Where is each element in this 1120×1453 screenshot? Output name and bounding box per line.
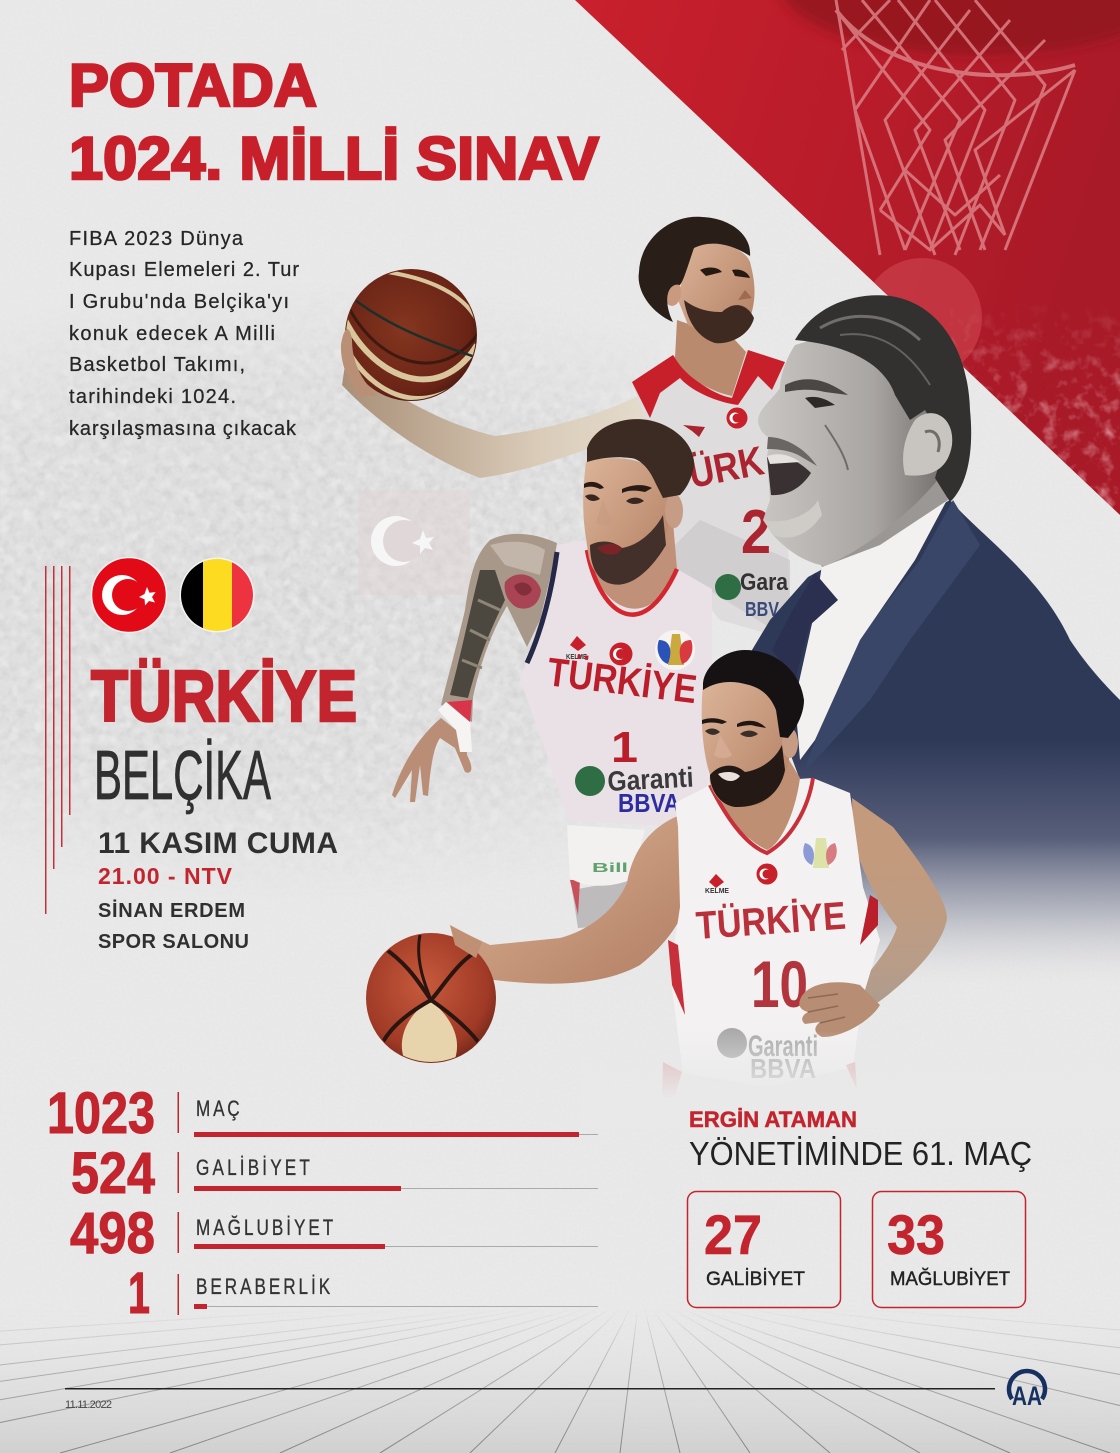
photo: front player dribbling: TÜRKİYE [695,895,847,948]
icon: hoop net [836,0,1075,255]
match details: 21.00 - NTV [98,863,233,889]
background: basketball court floor [0,1316,1120,1453]
coach hair [795,295,971,502]
hand with tape [392,718,471,802]
intro text block: FIBA 2023 Dünya [69,228,244,250]
stat: wins [71,1141,598,1206]
stat: draws [128,1261,598,1326]
match details: SİNAN ERDEM [98,899,245,922]
intro text block: tarihindeki 1024. [69,386,236,408]
intro text block: I Grubu'nda Belçika'yı [69,291,289,313]
left arm [450,815,690,984]
coach ear [903,413,952,476]
title: 1024. MİLLİ SINAV [69,125,599,192]
coach heading: ERGİN ATAMAN [689,1107,857,1132]
card: coach wins: 27 [704,1203,762,1266]
photo: back player with raised ball [342,217,790,640]
eyes [702,718,766,728]
hair [587,419,694,498]
photo: coach Ergin Ataman [752,295,1120,985]
background: faded crowd [0,336,640,850]
coach suit [752,500,1120,985]
photo: middle player: TÜRKİYE [545,649,699,712]
photo: front player dribbling: 10 [751,947,808,1021]
stat: wins: GALİBİYET [196,1155,310,1181]
card: coach losses: MAĞLUBİYET [890,1268,1010,1290]
photo: back player with raised ball: Gara [740,569,789,596]
shorts and leg [572,880,628,928]
hand on jersey [799,982,880,1037]
coach face [758,320,950,566]
match details [98,827,338,953]
date: 11.11.2022 [65,1399,112,1411]
icon: AA logo [1009,1371,1045,1411]
jersey [670,778,880,1087]
coach eye and brow [785,379,848,395]
match teams [91,657,357,814]
card: coach losses [872,1192,1026,1308]
face [702,682,790,808]
photo fade at the bottom [580,1030,1120,1128]
coach shirt [795,500,947,760]
photo: middle player: BBVA [618,788,680,818]
card: coach losses: 33 [887,1203,945,1266]
stat: losses: MAĞLUBİYET [196,1215,333,1241]
photo: middle player [392,419,712,928]
hair [703,650,804,738]
icon: Turkish flag [92,558,166,632]
intro text block [69,228,299,440]
intro text block: Basketbol Takımı, [69,354,245,376]
match details: 11 KASIM CUMA [98,827,338,860]
beard [590,515,666,585]
face [583,458,669,585]
side trim [668,940,685,1015]
stat: matches [47,1081,598,1146]
photo: middle player: 1 [611,723,638,772]
jersey [520,540,712,826]
icon: AA logo: AA [1012,1381,1042,1411]
stat: losses: 498 [70,1201,155,1266]
intro text block: konuk edecek A Milli [69,323,275,345]
coach neck [800,440,948,567]
match teams: BELÇİKA [94,736,271,814]
match teams: TÜRKİYE [91,657,357,737]
neck [712,745,800,850]
stat: wins: 524 [71,1141,155,1206]
card: coach wins [688,1192,840,1308]
beard [710,745,785,807]
icon: dribbled basketball [366,925,496,1070]
stat: draws: 1 [128,1261,150,1326]
title [69,52,599,192]
photo: front player dribbling: Garanti [748,1030,818,1063]
card: coach wins: GALİBİYET [706,1269,805,1290]
jersey marks [709,874,724,888]
tattooed arm [441,534,557,722]
photo: back player with raised ball: BBV [745,599,780,621]
photo: middle player: Bill [592,860,628,875]
stats: all-time record bars [47,1081,598,1326]
coach heading: YÖNETİMİNDE 61. MAÇ [689,1135,1032,1172]
coach tie [772,573,838,680]
stat: losses [70,1201,598,1266]
decorative match stripes [45,566,70,914]
coach mouth [767,456,811,495]
photo: middle player: Garanti [607,762,694,797]
icon: raised basketball [341,269,478,401]
photo: middle player: KELME [566,654,587,661]
intro text block: Kupası Elemeleri 2. Tur [69,259,299,281]
photo: front player dribbling [450,650,947,1105]
jersey marks [570,636,586,651]
stat: matches: MAÇ [196,1097,240,1122]
right arm [852,798,947,1010]
photo: back player with raised ball: ÜRK [685,437,768,497]
red diagonal panel with hoop [575,0,1120,520]
coach heading [689,1107,1032,1172]
eyes [584,482,652,493]
icon: Belgian flag [180,558,256,632]
photo: front player dribbling: KELME [705,888,729,895]
neck [590,510,677,609]
stat: matches: 1023 [47,1081,155,1146]
match details: SPOR SALONU [98,931,249,953]
stat: draws: BERABERLİK [196,1274,330,1300]
photo: front player dribbling: BBVA [750,1053,816,1084]
intro text block: karşılaşmasına çıkacak [69,418,297,440]
photo: back player with raised ball: 2 [741,498,771,567]
footer rule [65,1388,995,1390]
title: POTADA [69,52,317,119]
